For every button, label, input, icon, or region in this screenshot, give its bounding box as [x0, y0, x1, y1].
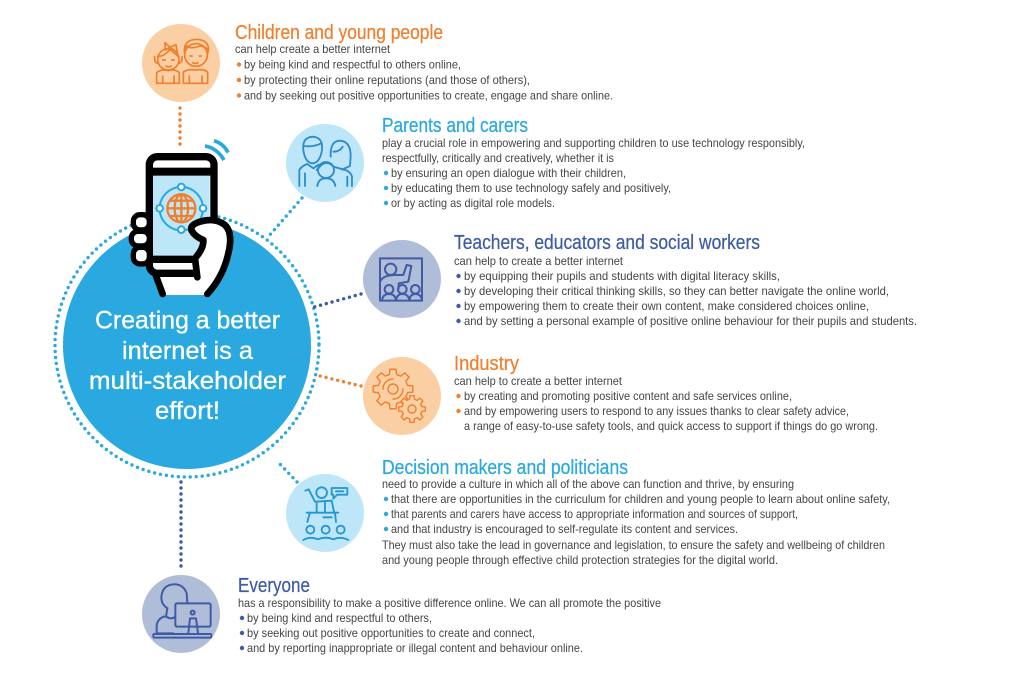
- panel: parents and carers: [286, 115, 805, 210]
- icon: gears: [363, 357, 441, 435]
- icon: two children: [142, 24, 220, 102]
- icon: person at computer: [142, 575, 220, 653]
- panel: teachers, educators and social workers: by equipping their pupils and students with digital literacy skills,: [464, 269, 780, 283]
- connector: everyone: [179, 482, 183, 567]
- panel: children and young people: can help create a better internet: [235, 42, 391, 56]
- central circle: multi-stakeholder message: internet is a: [122, 337, 253, 365]
- panel: teachers, educators and social workers: [363, 232, 917, 328]
- connector: children: [178, 108, 182, 145]
- central circle: multi-stakeholder message: Creating a better: [95, 306, 280, 334]
- panel: parents and carers: by ensuring an open dialogue with their children,: [391, 166, 626, 180]
- panel: decision makers and politicians: and that industry is encouraged to self-regulate its content and services.: [391, 522, 738, 536]
- connector: parents: [268, 198, 302, 237]
- panel: everyone: and by reporting inappropriate or illegal content and behaviour online.: [247, 641, 583, 655]
- panel: decision makers and politicians: [286, 457, 890, 567]
- panel: industry: can help to create a better internet: [454, 374, 623, 388]
- panel: teachers, educators and social workers: by developing their critical thinking skills, so they can better navigate the online world,: [464, 284, 889, 298]
- panel: teachers, educators and social workers: Teachers, educators and social workers: [454, 232, 760, 254]
- central circle: multi-stakeholder message: multi-stakeholder: [89, 367, 286, 395]
- panel: industry: a range of easy-to-use safety tools, and quick access to support if things do go wrong.: [464, 419, 878, 433]
- panel: industry: and by empowering users to respond to any issues thanks to clear safety advice,: [464, 404, 849, 418]
- panel: children and young people: by being kind and respectful to others online,: [244, 58, 461, 72]
- panel: teachers, educators and social workers: can help to create a better internet: [454, 254, 624, 268]
- panel: parents and carers: play a crucial role in empowering and supporting children to use technology responsibly,: [382, 136, 805, 150]
- icon: teacher at board with pupils: [363, 240, 441, 318]
- panel: industry: by creating and promoting positive content and safe services online,: [464, 389, 792, 403]
- icon: speaker at podium with audience: [286, 474, 364, 552]
- panel: decision makers and politicians: that there are opportunities in the curriculum for children and young people to learn about online safety,: [391, 492, 890, 506]
- panel: parents and carers: Parents and carers: [382, 115, 528, 137]
- panel: everyone: has a responsibility to make a positive difference online. We can all promote the positive: [238, 596, 661, 610]
- connector: teachers: [314, 294, 361, 307]
- panel: industry: Industry: [454, 353, 519, 375]
- panel: children and young people: [142, 22, 613, 102]
- panel: decision makers and politicians: They must also take the lead in governance and legislation, to ensure the safety and wellbeing of children: [382, 538, 885, 552]
- panel: children and young people: Children and young people: [235, 22, 443, 44]
- central circle: multi-stakeholder message: effort!: [155, 397, 220, 425]
- panel: teachers, educators and social workers: by empowering them to create their own content, make considered choices online,: [464, 299, 869, 313]
- panel: everyone: Everyone: [238, 575, 310, 597]
- panel: everyone: [142, 575, 661, 655]
- panel: teachers, educators and social workers: and by setting a personal example of positive online behaviour for their pupils and students.: [464, 314, 917, 328]
- panel: industry: [363, 353, 878, 435]
- connector: industry: [320, 376, 361, 386]
- panel: children and young people: and by seeking out positive opportunities to create, engage and share online.: [244, 88, 613, 102]
- connector: decision makers: [278, 462, 297, 482]
- panel: parents and carers: or by acting as digital role models.: [391, 196, 555, 210]
- panel: decision makers and politicians: Decision makers and politicians: [382, 457, 628, 479]
- panel: children and young people: by protecting their online reputations (and those of others),: [244, 73, 530, 87]
- icon: parents with child: [286, 124, 364, 202]
- panel: parents and carers: by educating them to use technology safely and positively,: [391, 181, 671, 195]
- panel: everyone: by being kind and respectful to others,: [247, 611, 432, 625]
- panel: parents and carers: respectfully, critically and creatively, whether it is: [382, 151, 614, 165]
- panel: decision makers and politicians: need to provide a culture in which all of the above can function and thrive, by ensuring: [382, 477, 794, 491]
- central circle: multi-stakeholder message: [55, 213, 319, 477]
- panel: everyone: by seeking out positive opportunities to create and connect,: [247, 626, 535, 640]
- icon: smartphone held in hand: [131, 141, 232, 295]
- panel: decision makers and politicians: that parents and carers have access to appropriate information and sources of support,: [391, 507, 798, 521]
- panel: decision makers and politicians: and young people through effective child protection strategies for the digital world.: [382, 553, 778, 567]
